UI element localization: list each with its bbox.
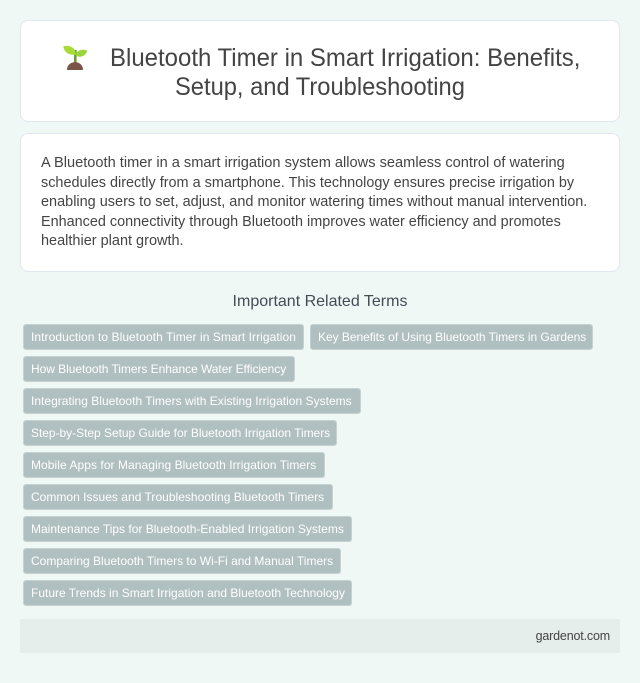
icon: seedling	[63, 46, 88, 70]
tag	[23, 356, 295, 382]
panel: intro card	[20, 133, 620, 272]
tag	[310, 324, 593, 350]
title: Bluetooth Timer in Smart Irrigation: Benefits,	[110, 44, 580, 72]
tag	[23, 388, 361, 414]
title: Setup, and Troubleshooting	[175, 73, 465, 101]
tag	[23, 516, 352, 542]
tag: Key Benefits of Using Bluetooth Timers in Gardens	[318, 330, 586, 344]
intro paragraph	[41, 154, 587, 249]
footer text: gardenot.com	[536, 629, 610, 643]
tag	[23, 452, 325, 478]
footer bar	[20, 619, 620, 653]
tag	[23, 324, 304, 350]
tag	[23, 484, 333, 510]
heading: related terms: Important Related Terms	[233, 293, 407, 310]
intro paragraph: healthier plant growth.	[41, 232, 184, 249]
intro paragraph: Enhanced connectivity through Bluetooth improves water efficiency and promotes	[41, 212, 561, 230]
tag: Future Trends in Smart Irrigation and Bluetooth Technology	[31, 586, 345, 600]
panel: title card	[20, 20, 620, 122]
tag: Comparing Bluetooth Timers to Wi-Fi and Manual Timers	[31, 554, 333, 568]
tag	[23, 580, 352, 606]
title	[110, 44, 580, 101]
tag list	[23, 324, 593, 606]
tag: Common Issues and Troubleshooting Bluetooth Timers	[31, 490, 324, 504]
tag: Introduction to Bluetooth Timer in Smart Irrigation	[31, 330, 296, 344]
tag: How Bluetooth Timers Enhance Water Efficiency	[31, 362, 286, 376]
tag: Integrating Bluetooth Timers with Existing Irrigation Systems	[31, 394, 352, 408]
tag: Maintenance Tips for Bluetooth-Enabled Irrigation Systems	[31, 522, 344, 536]
tag	[23, 548, 341, 574]
intro paragraph: schedules directly from a smartphone. This technology ensures precise irrigation by	[41, 174, 574, 190]
intro paragraph: enabling users to set, adjust, and monitor watering times without manual intervention.	[41, 193, 587, 210]
intro paragraph: A Bluetooth timer in a smart irrigation system allows seamless control of watering	[41, 154, 565, 171]
tag: Mobile Apps for Managing Bluetooth Irrigation Timers	[31, 458, 316, 472]
tag: Step-by-Step Setup Guide for Bluetooth Irrigation Timers	[31, 426, 330, 440]
tag	[23, 420, 337, 446]
